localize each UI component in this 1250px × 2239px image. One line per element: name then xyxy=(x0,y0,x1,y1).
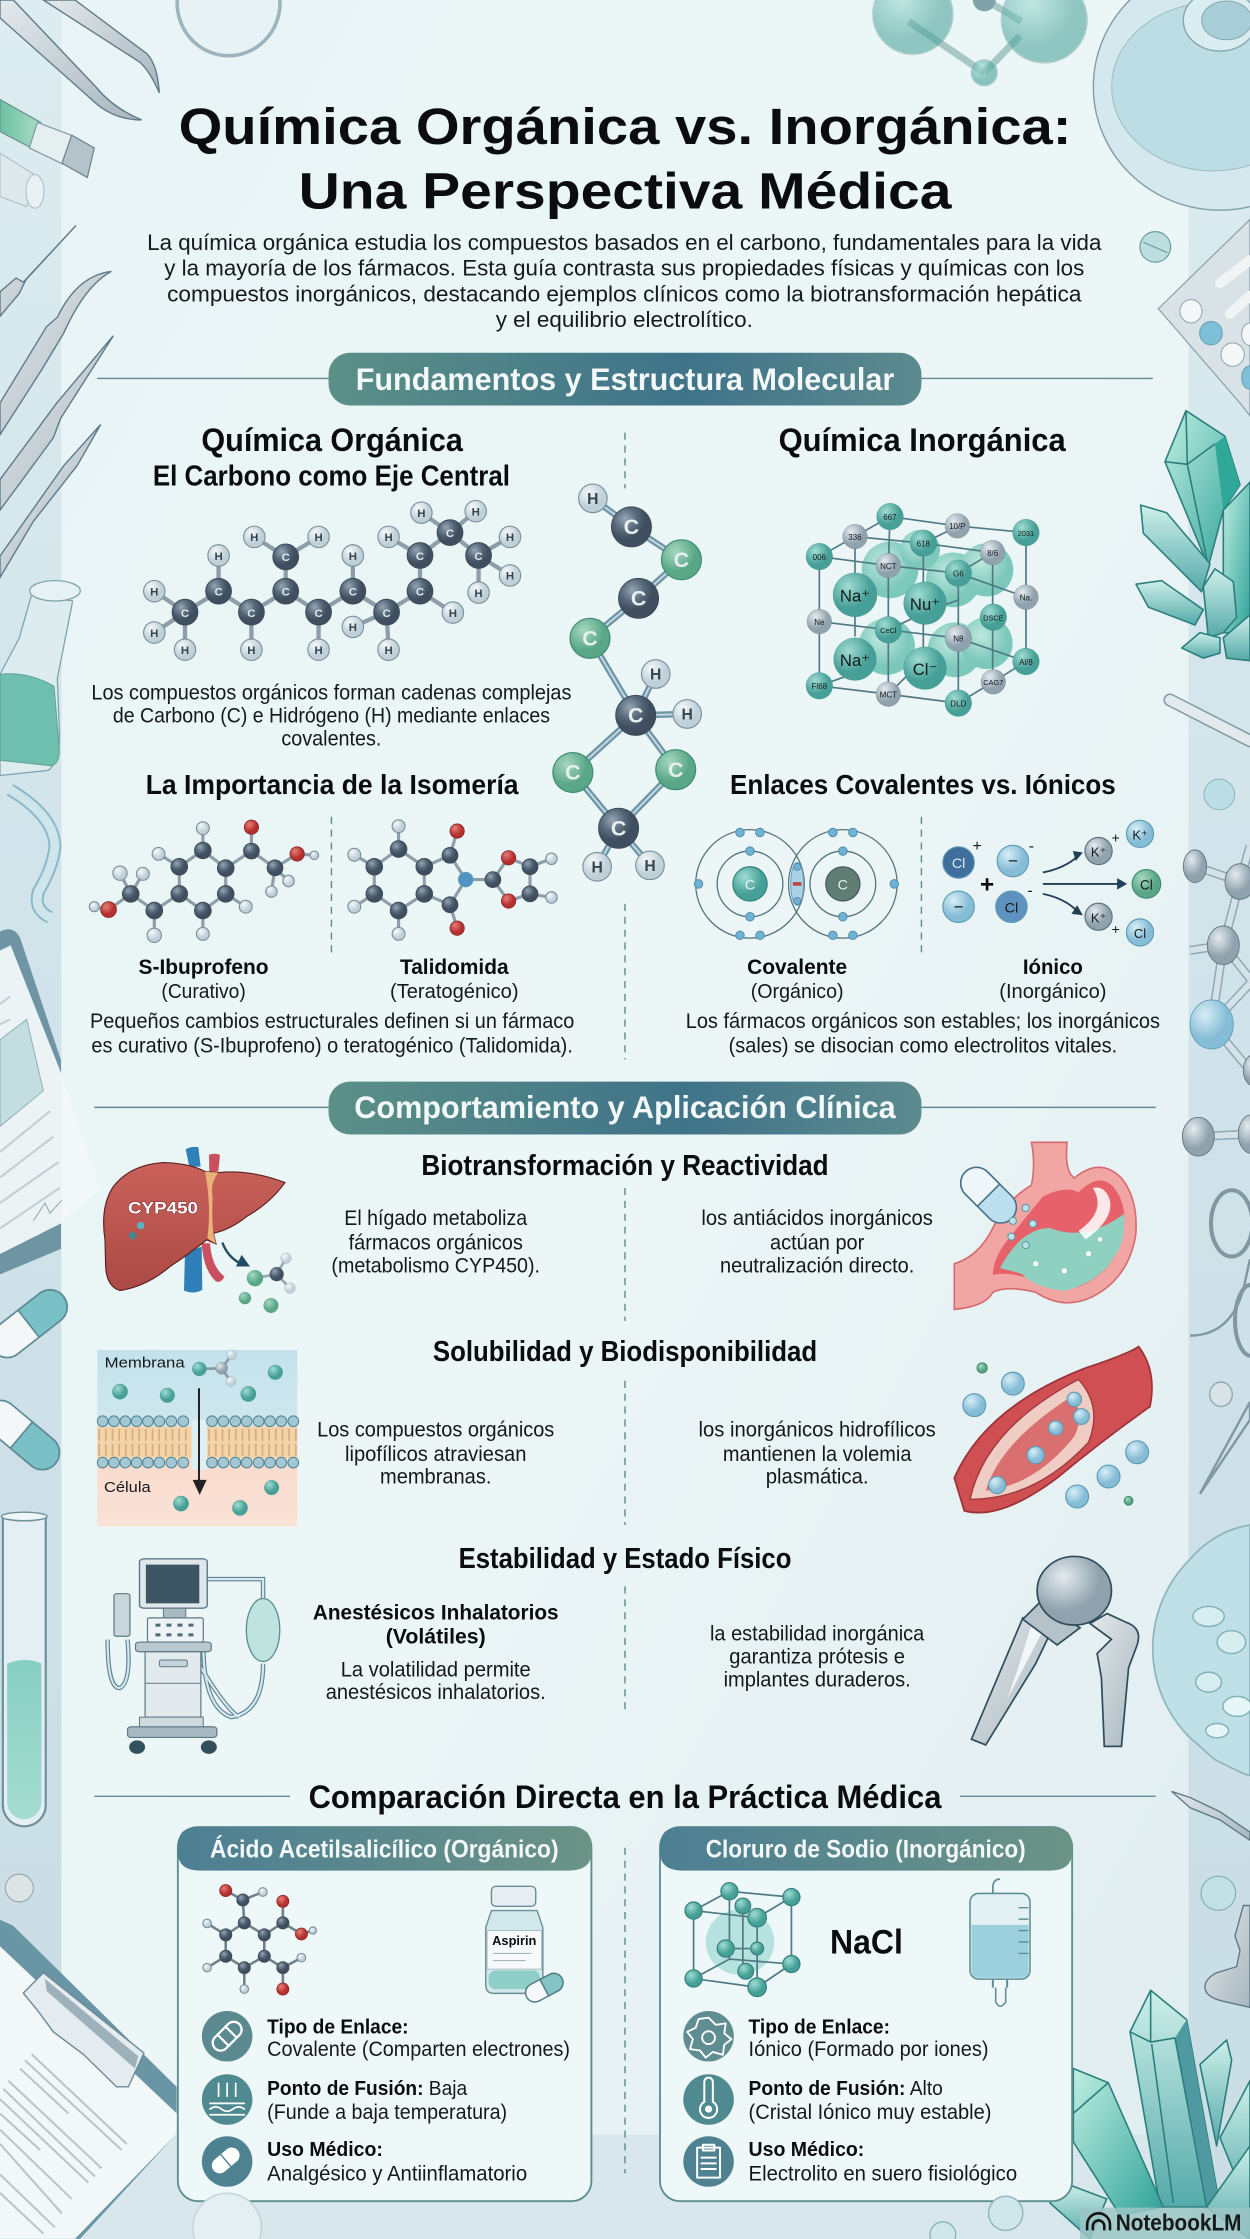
nacl formula: NaCl xyxy=(830,1923,903,1961)
chart: ionic dissociation diagram: + xyxy=(1112,830,1120,846)
icon: test tube xyxy=(1,1512,47,1826)
text: implants xyxy=(710,1623,925,1691)
labels: S-ibuprofeno xyxy=(139,956,269,1003)
section heading: comparacion: Comparación Directa en la Práctica Médica xyxy=(309,1779,943,1815)
chart: hydrocarbon chain molecule: C xyxy=(282,552,290,564)
decorative petri dish xyxy=(1153,1524,1250,1775)
section banner: fundamentos: Fundamentos y Estructura Molecular xyxy=(356,362,894,397)
chart: hydrocarbon chain molecule: H xyxy=(472,506,480,518)
chart: cell membrane: Membrana xyxy=(105,1355,185,1372)
text: anesthetics xyxy=(313,1601,559,1704)
text: isomerism xyxy=(90,1010,574,1057)
chart: central vertical molecule: H xyxy=(644,858,656,875)
chart: hydrocarbon chain molecule: C xyxy=(314,608,323,620)
icon: stomach xyxy=(954,1142,1136,1309)
decorative dish and molecule, top xyxy=(177,0,1087,86)
chart: ionic crystal lattice: 618 xyxy=(917,540,931,549)
text: hydrophilic: los inorgánicos hidrofílicos xyxy=(699,1419,936,1442)
chart: central vertical molecule: C xyxy=(668,758,683,782)
decorative instruments, left column top xyxy=(0,0,159,776)
row: tipo de enlace xyxy=(202,2011,570,2062)
labels: S-ibuprofeno: S-Ibuprofeno xyxy=(139,956,269,979)
chart: ionic dissociation diagram: − xyxy=(1008,851,1018,871)
chart: central vertical molecule xyxy=(553,484,701,881)
chart: hydrocarbon chain molecule: H xyxy=(314,645,323,657)
chart: central vertical molecule: C xyxy=(631,586,646,610)
chart: hydrocarbon chain molecule: C xyxy=(181,608,189,620)
aspirin bottle xyxy=(486,1886,566,2005)
chart: ionic crystal lattice: CeCl xyxy=(880,626,897,635)
row: tipo de enlace: Covalente (Comparten electrones) xyxy=(267,2038,570,2061)
chart: ionic crystal lattice: 667 xyxy=(883,513,897,522)
chart: ionic dissociation diagram: + xyxy=(1112,922,1120,938)
row: punto de fusion: Ponto de Fusión: Alto xyxy=(749,2077,943,2100)
chart: ionic dissociation diagram: - xyxy=(1029,838,1034,855)
row: tipo de enlace: Tipo de Enlace: xyxy=(749,2015,890,2038)
chart: ionic dissociation diagram: Cl xyxy=(1005,900,1018,916)
chart: hydrocarbon chain molecule: H xyxy=(181,645,189,657)
text: hydrophilic xyxy=(699,1419,936,1489)
decorative flask, blister, crystals, right column top xyxy=(1093,0,1250,810)
chart: hydrocarbon chain molecule: C xyxy=(382,608,391,620)
icon: liver xyxy=(104,1147,295,1313)
text: anesthetics: anestésicos inhalatorios. xyxy=(326,1681,546,1704)
heading: quimica organica: Química Orgánica xyxy=(201,421,464,458)
inner dividers xyxy=(331,817,921,954)
text: bonds: Los fármacos orgánicos son estables; los inorgánicos xyxy=(686,1010,1160,1033)
text: anesthetics: Anestésicos Inhalatorios xyxy=(313,1601,559,1624)
nacl lattice xyxy=(685,1883,800,1997)
chart: cell membrane: Célula xyxy=(104,1479,151,1496)
text: implants: la estabilidad inorgánica xyxy=(710,1623,925,1646)
chart: hydrocarbon chain molecule xyxy=(144,500,521,660)
heading: isomeria: La Importancia de la Isomería xyxy=(146,769,519,800)
text: anesthetics: La volatilidad permite xyxy=(341,1658,531,1681)
chart: ionic dissociation diagram: K⁺ xyxy=(1132,828,1148,843)
text: antacids xyxy=(701,1207,933,1277)
text: isomerism: Pequeños cambios estructurales definen si un fármaco xyxy=(90,1010,574,1033)
text: organic compounds: Los compuestos orgánicos forman cadenas complejas xyxy=(91,682,571,705)
text: antacids: neutralización directo. xyxy=(720,1254,914,1277)
heading: enlaces: Enlaces Covalentes vs. Iónicos xyxy=(730,769,1116,800)
chart: hydrocarbon chain molecule: C xyxy=(474,551,483,563)
chart: central vertical molecule: C xyxy=(674,548,689,572)
heading: quimica inorganica: Química Inorgánica xyxy=(779,421,1066,458)
chart: cell membrane xyxy=(97,1350,299,1527)
text: lipophilic xyxy=(317,1419,554,1489)
chart: hydrocarbon chain molecule: H xyxy=(474,588,483,600)
chart: hydrocarbon chain molecule: H xyxy=(417,508,426,520)
decorative scalpel, bead, stand, crystals, bottom right xyxy=(1050,1791,1250,2239)
heading: quimica organica: El Carbono como Eje Central xyxy=(153,461,510,492)
text: implants: implantes duraderos. xyxy=(724,1668,911,1691)
card title: Ácido Acetilsalicílico (Orgánico) xyxy=(210,1835,559,1864)
icon: blood vessel xyxy=(954,1347,1152,1513)
chart: ionic crystal lattice: DSCE xyxy=(983,614,1004,623)
text: antacids: los antiácidos inorgánicos xyxy=(701,1207,933,1230)
chart: ionic crystal lattice: Na. xyxy=(1020,594,1032,603)
chart: hydrocarbon chain molecule: C xyxy=(282,586,290,598)
card header xyxy=(178,1827,591,1871)
text: hydrophilic: mantienen la volemia xyxy=(723,1443,912,1466)
chart: hydrocarbon chain molecule: C xyxy=(446,528,454,540)
text: liver: fármacos orgánicos xyxy=(349,1231,523,1254)
watermark: NotebookLM xyxy=(1080,2208,1250,2239)
chart: ionic crystal lattice: Nu⁺ xyxy=(910,595,940,614)
chart: hydrocarbon chain molecule: C xyxy=(349,586,357,598)
chart: ionic crystal lattice: Al/8 xyxy=(1019,658,1033,667)
chart: ionic dissociation diagram: + xyxy=(973,838,982,855)
text: implants: garantiza prótesis e xyxy=(729,1646,905,1669)
text: anesthetics: (Volátiles) xyxy=(386,1626,486,1649)
aspirin bottle: Aspirin xyxy=(492,1933,537,1948)
row: uso medico: Analgésico y Antiinflamatorio xyxy=(267,2162,527,2185)
labels: talidomida xyxy=(390,956,519,1003)
chart: central vertical molecule: H xyxy=(587,491,599,508)
chart: ionic crystal lattice: 8/6 xyxy=(987,549,999,558)
chart: hydrocarbon chain molecule: H xyxy=(250,532,258,544)
chart: covalent bond diagram xyxy=(694,828,899,940)
labels: ionico: (Inorgánico) xyxy=(999,980,1106,1003)
heading: biotransformacion: Biotransformación y Reactividad xyxy=(421,1150,829,1182)
chart: ionic dissociation diagram: Cl xyxy=(1134,926,1146,941)
chart: hydrocarbon chain molecule: H xyxy=(349,551,357,563)
chart: hydrocarbon chain molecule: H xyxy=(506,571,514,583)
center divider compare xyxy=(624,1848,626,2173)
icon: anesthesia machine xyxy=(108,1559,280,1754)
text: organic compounds: covalentes. xyxy=(281,727,381,750)
chart: central vertical molecule: C xyxy=(611,816,626,840)
decorative beads, bottom band xyxy=(193,2193,1023,2239)
chart: ionic dissociation diagram: K⁺ xyxy=(1091,845,1106,860)
text: liver xyxy=(331,1207,540,1277)
labels: ionico: Iónico xyxy=(1023,956,1083,979)
row: tipo de enlace: Iónico (Formado por iones) xyxy=(749,2038,989,2061)
heading: quimica organica xyxy=(153,421,510,492)
icon: liver: CYP450 xyxy=(128,1199,198,1218)
row: punto de fusion xyxy=(202,2074,507,2125)
row: tipo de enlace: Tipo de Enlace: xyxy=(267,2015,409,2038)
decorative molecules, scissors, right column middle xyxy=(1182,846,1250,1494)
chart: ionic crystal lattice: CAG7 xyxy=(983,678,1003,687)
chart: hydrocarbon chain molecule: H xyxy=(384,645,393,657)
chart: hydrocarbon chain molecule: C xyxy=(214,586,223,598)
watermark: NotebookLM: NotebookLM xyxy=(1116,2209,1241,2235)
icon: capsule upper left xyxy=(0,1283,74,1364)
chart: hydrocarbon chain molecule: C xyxy=(416,551,424,563)
chart: ionic crystal lattice: 2031 xyxy=(1018,529,1034,538)
chart: ionic dissociation diagram: K⁺ xyxy=(1091,910,1106,925)
intro text xyxy=(147,230,1102,332)
chart: thalidomide molecule xyxy=(348,820,557,940)
row: uso medico: Uso Médico: xyxy=(267,2138,383,2161)
text: bonds: (sales) se disocian como electrolitos vitales. xyxy=(729,1034,1117,1057)
center divider upper xyxy=(624,433,626,1060)
chart: hydrocarbon chain molecule: H xyxy=(150,586,158,598)
chart: central vertical molecule: H xyxy=(591,859,603,876)
chart: ionic crystal lattice: G6 xyxy=(953,570,964,579)
text: lipophilic: membranas. xyxy=(380,1466,491,1489)
chart: ionic dissociation diagram: Cl xyxy=(952,856,965,872)
labels: S-ibuprofeno: (Curativo) xyxy=(161,980,246,1003)
row: tipo de enlace xyxy=(683,2011,989,2062)
title: Química Orgánica vs. Inorgánica: xyxy=(179,97,1071,155)
icon: capsule lower left xyxy=(0,1393,66,1477)
card title: Cloruro de Sodio (Inorgánico) xyxy=(706,1836,1026,1864)
chart: hydrocarbon chain molecule: H xyxy=(384,532,393,544)
chart: hydrocarbon chain molecule: H xyxy=(349,622,357,634)
chart: covalent bond diagram: C xyxy=(838,878,848,894)
text: organic compounds: de Carbono (C) e Hidrógeno (H) mediante enlaces xyxy=(113,705,550,728)
text: lipophilic: Los compuestos orgánicos xyxy=(317,1419,554,1442)
decorative clipboard, bottom left xyxy=(0,1874,177,2239)
panel: acido acetilsalicilico xyxy=(178,1827,591,2201)
chart: hydrocarbon chain molecule: H xyxy=(247,645,256,657)
row: uso medico xyxy=(202,2136,527,2187)
chart: ionic dissociation diagram: - xyxy=(1027,882,1033,899)
text: organic compounds xyxy=(91,682,571,750)
chart: ionic crystal lattice: Ne xyxy=(814,618,825,627)
heading: estabilidad: Estabilidad y Estado Físico xyxy=(459,1543,791,1575)
decorative document and capsules, left column middle xyxy=(0,790,100,1274)
chart: ionic crystal lattice: Na⁺ xyxy=(840,651,870,670)
chart: ionic crystal lattice: Cl⁻ xyxy=(913,660,937,679)
row: punto de fusion: (Funde a baja temperatura) xyxy=(267,2101,507,2124)
panel: cloruro de sodio xyxy=(660,1827,1072,2201)
labels: covalente: (Orgánico) xyxy=(751,980,844,1003)
aspirin molecule xyxy=(203,1885,316,1995)
chart: covalent bond diagram: C xyxy=(745,878,755,894)
chart: central vertical molecule: C xyxy=(628,704,643,728)
text: lipophilic: lipofílicos atraviesan xyxy=(345,1443,526,1466)
iv bag xyxy=(970,1879,1030,2006)
chart: central vertical molecule: C xyxy=(624,515,639,539)
chart: central vertical molecule: H xyxy=(650,667,661,684)
row: uso medico: Electrolito en suero fisiológico xyxy=(749,2162,1017,2185)
chart: hydrocarbon chain molecule: H xyxy=(449,608,457,620)
row: uso medico xyxy=(683,2136,1017,2187)
center divider clinic xyxy=(624,1188,626,1709)
chart: ionic dissociation diagram: Cl xyxy=(1140,878,1153,893)
chart: central vertical molecule: C xyxy=(582,626,598,650)
icon: bubbles xyxy=(1008,1204,1036,1249)
labels: talidomida: (Teratogénico) xyxy=(390,980,519,1003)
chart: ionic dissociation diagram xyxy=(943,820,1161,946)
labels: ionico xyxy=(999,956,1106,1003)
chart: ionic dissociation diagram: − xyxy=(954,896,964,916)
text: antacids: actúan por xyxy=(770,1231,864,1254)
chart: central vertical molecule: C xyxy=(565,761,581,785)
chart: hydrocarbon chain molecule: H xyxy=(314,532,323,544)
text: isomerism: es curativo (S-Ibuprofeno) o teratogénico (Talidomida). xyxy=(91,1034,573,1057)
intro text: La química orgánica estudia los compuestos basados en el carbono, fundamentales para la vida xyxy=(147,230,1102,255)
row: punto de fusion: (Cristal Iónico muy estable) xyxy=(749,2101,991,2124)
title: Una Perspectiva Médica xyxy=(299,161,952,219)
chart: ionic crystal lattice: 336 xyxy=(848,533,862,542)
chart: ionic crystal lattice: 006 xyxy=(813,553,827,562)
chart: ionic crystal lattice xyxy=(806,503,1039,716)
chart: ionic crystal lattice: DLD xyxy=(950,699,967,708)
chart: S-ibuprofen molecule xyxy=(89,820,319,942)
card header xyxy=(660,1827,1072,1871)
chart: hydrocarbon chain molecule: C xyxy=(416,586,424,598)
section banner: fundamentos xyxy=(97,353,1153,406)
chart: ionic crystal lattice: Na⁺ xyxy=(840,587,870,606)
section banner: comportamiento: Comportamiento y Aplicación Clínica xyxy=(354,1090,896,1125)
text: liver: (metabolismo CYP450). xyxy=(331,1254,540,1277)
section banner: comportamiento xyxy=(94,1082,1156,1134)
labels: covalente xyxy=(747,956,847,1003)
chart: hydrocarbon chain molecule: H xyxy=(506,532,514,544)
row: punto de fusion: Ponto de Fusión: Baja xyxy=(267,2077,468,2100)
intro text: y el equilibrio electrolítico. xyxy=(496,307,753,332)
intro text: compuestos inorgánicos, destacando ejemplos clínicos como la biotransformación hepática xyxy=(167,281,1082,306)
text: liver: El hígado metaboliza xyxy=(344,1207,528,1230)
chart: ionic crystal lattice: 10/P xyxy=(949,522,966,531)
chart: ionic dissociation diagram: + xyxy=(980,871,994,898)
heading: solubilidad: Solubilidad y Biodisponibilidad xyxy=(433,1336,817,1368)
chart: central vertical molecule: H xyxy=(681,707,693,724)
chart: hydrocarbon chain molecule: H xyxy=(150,628,158,640)
chart: hydrocarbon chain molecule: C xyxy=(247,608,256,620)
chart: ionic crystal lattice: N8 xyxy=(953,635,964,644)
chart: ionic crystal lattice: Fl68 xyxy=(812,682,828,691)
chart: ionic crystal lattice: NCT xyxy=(880,562,897,571)
icon: hip prosthesis xyxy=(971,1556,1139,1746)
intro text: y la mayoría de los fármacos. Esta guía contrasta sus propiedades físicas y químicas con los xyxy=(164,256,1084,281)
icon: antacid capsule xyxy=(954,1161,1023,1230)
chart: ionic crystal lattice: MCT xyxy=(880,690,897,699)
labels: talidomida: Talidomida xyxy=(400,956,509,979)
chart: hydrocarbon chain molecule: H xyxy=(214,551,223,563)
row: uso medico: Uso Médico: xyxy=(749,2138,864,2161)
labels: covalente: Covalente xyxy=(747,956,847,979)
row: punto de fusion xyxy=(683,2074,991,2125)
text: bonds xyxy=(686,1010,1160,1057)
title xyxy=(179,97,1071,219)
text: hydrophilic: plasmática. xyxy=(766,1466,869,1489)
